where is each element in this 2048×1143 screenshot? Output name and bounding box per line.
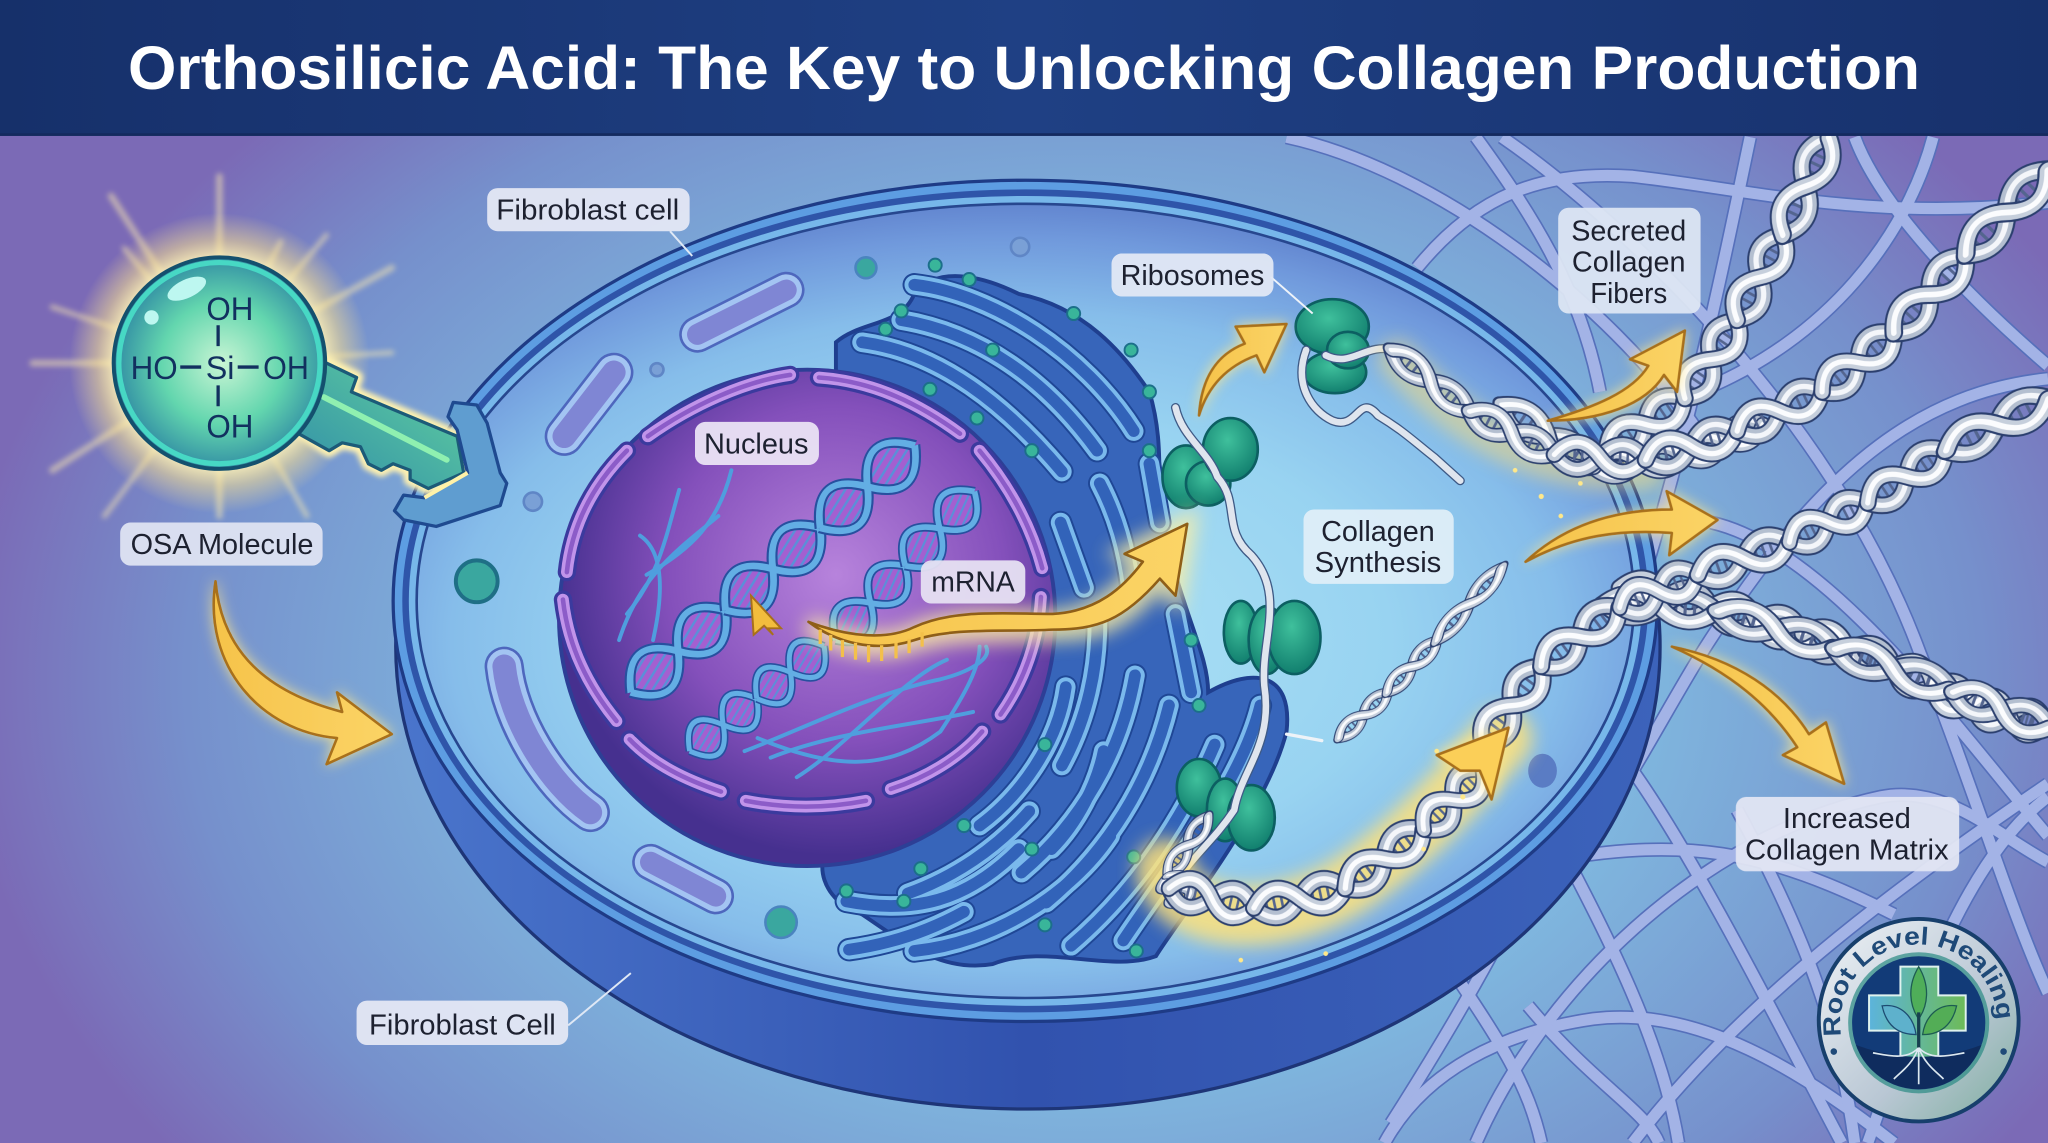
label: Fibroblast cell: Fibroblast cell	[496, 194, 679, 226]
organelles: vesicles and mitochondria	[456, 238, 1557, 938]
key glow rays	[33, 176, 392, 516]
logo roots area	[1856, 1045, 1981, 1089]
DNA strands	[616, 428, 989, 767]
golden glow around collagen ropes	[1165, 359, 1646, 915]
chemical formula: OH	[206, 290, 253, 327]
title bar	[0, 0, 2048, 136]
logo cross	[1869, 967, 1966, 1061]
label: Nucleus	[695, 422, 819, 465]
small gold pointer in DNA	[751, 596, 781, 635]
label: Collagen Synthesis: Collagen	[1321, 516, 1435, 548]
chemical formula: HO	[131, 349, 178, 386]
arrow: increased matrix	[1672, 647, 1844, 784]
label: Collagen Synthesis: Synthesis	[1315, 547, 1441, 579]
chromatin threads	[619, 470, 987, 777]
label: Fibroblast Cell: Fibroblast Cell	[369, 1010, 556, 1042]
rope: main secreted fibre rising right	[1471, 386, 2048, 753]
key shaft	[294, 363, 464, 489]
key head	[114, 257, 325, 469]
rope: secreted fibre lower strand	[1603, 574, 2048, 740]
arrow: rising collagen head	[1437, 728, 1509, 799]
cell receptor keyhole	[394, 402, 507, 526]
chemical formula: OH	[263, 349, 309, 386]
label: Ribosomes	[1112, 253, 1313, 314]
label: Increased Collagen Matrix: Collagen Matrix	[1745, 835, 1949, 867]
arrow: synthesis outward	[1526, 491, 1718, 562]
label: Secreted Collagen Fibers: Secreted	[1571, 215, 1686, 247]
nuclear envelope pores	[563, 375, 1042, 807]
label: mRNA: mRNA	[931, 567, 1016, 599]
rope: upper collagen fibre	[1385, 160, 2048, 480]
nucleus	[559, 370, 1055, 866]
arrow: secreted fibres	[1548, 330, 1685, 421]
ribosomes	[1162, 299, 1369, 850]
rope: upper vertical fibre	[1598, 131, 1842, 463]
icon: glowing OSA key	[33, 176, 464, 516]
ribosome cluster middle	[1224, 601, 1320, 674]
title: Orthosilicic Acid: The Key to Unlocking Collagen Production	[128, 34, 1920, 103]
chemical formula	[131, 290, 309, 445]
label: Nucleus: Nucleus	[704, 428, 808, 460]
logo plant	[1873, 967, 1964, 1084]
sparkles	[1238, 468, 1583, 962]
label: Secreted Collagen Fibers: Fibers	[1590, 278, 1667, 310]
rope: loop strand from ribosome	[1158, 812, 1214, 909]
label: Collagen Synthesis	[1304, 509, 1454, 584]
mRNA teeth	[820, 630, 922, 662]
label: Ribosomes: Ribosomes	[1121, 260, 1264, 292]
cell base disc	[396, 184, 1660, 1109]
panel: fibroblast cell	[393, 180, 1660, 1109]
label: Increased Collagen Matrix: Increased	[1783, 803, 1911, 835]
rough endoplasmic reticulum	[822, 259, 1287, 966]
arrow: mRNA leaving nucleus	[751, 524, 1187, 662]
arrow: to ribosome	[1199, 324, 1287, 415]
label: OSA Molecule: OSA Molecule	[131, 529, 313, 561]
rope: small collagen fibre	[1334, 563, 1507, 743]
logo: Root Level Healing badge	[1816, 917, 2021, 1124]
ribosome cluster top	[1296, 299, 1369, 393]
arrow: OSA molecule to cell	[214, 581, 392, 764]
label: Secreted Collagen Fibers: Collagen	[1572, 247, 1686, 279]
ribosome cluster lower	[1177, 759, 1275, 850]
label: OSA Molecule	[120, 523, 323, 566]
chemical formula: Si	[206, 349, 234, 386]
label: Increased Collagen Matrix	[1736, 797, 1959, 871]
rope: collagen triple helix forming	[1166, 760, 1493, 922]
protein strands	[1169, 349, 1460, 901]
label: Fibroblast cell	[487, 188, 692, 256]
label: mRNA	[921, 560, 1025, 604]
logo lettering: Root Level Healing	[1823, 926, 2010, 1035]
ribosome cluster upper	[1162, 418, 1258, 508]
label: Secreted Collagen Fibers	[1558, 208, 1701, 314]
label: Fibroblast Cell	[357, 973, 631, 1045]
chemical formula: OH	[206, 408, 253, 445]
cell membrane	[393, 180, 1657, 1022]
collagen matrix network	[1287, 137, 2048, 1143]
